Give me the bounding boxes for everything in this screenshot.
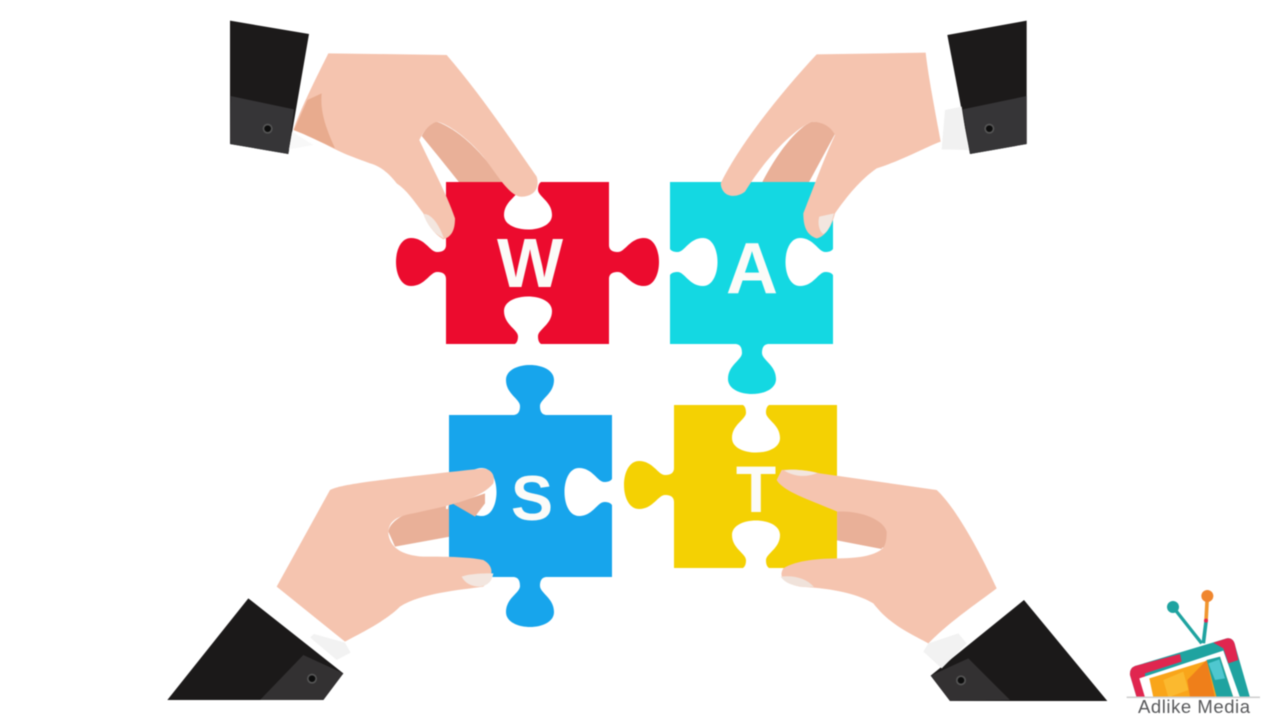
puzzle piece: blue S: S [511, 464, 553, 534]
sleeve: bottom-right [923, 600, 1107, 701]
puzzle piece: yellow T: T [736, 452, 776, 526]
sleeve: top-left [230, 21, 313, 154]
finger shadow: bottom-right [835, 511, 887, 549]
logo: Adlike Media [1127, 590, 1260, 717]
quadrant: A (top-right hand with cyan piece) [667, 21, 1027, 394]
puzzle piece: blue S [446, 365, 615, 627]
finger shadow: bottom-left [388, 500, 450, 547]
puzzle piece: yellow T [624, 402, 837, 571]
puzzle piece: cyan A [667, 182, 836, 394]
quadrant: W (top-left hand with red piece) [230, 21, 659, 347]
hand: top-right [721, 53, 941, 238]
quadrant: T (bottom-right hand with yellow piece) [624, 402, 1107, 701]
sleeve: top-right [942, 21, 1027, 154]
finger shadow: top-left [422, 122, 503, 183]
icon: TV with antennas [1127, 590, 1260, 697]
puzzle piece: red W: W [497, 224, 563, 302]
sleeve: bottom-left [167, 598, 351, 700]
puzzle piece: red W [396, 179, 659, 347]
finger shadow: top-right [762, 122, 835, 183]
quadrant: S (bottom-left hand with blue piece) [167, 365, 615, 700]
hand: bottom-right [777, 470, 997, 643]
logo text: Adlike Media [1138, 696, 1251, 717]
hand: bottom-left [277, 468, 494, 642]
puzzle piece: cyan A: A [726, 229, 778, 309]
hand: top-left [293, 53, 538, 239]
